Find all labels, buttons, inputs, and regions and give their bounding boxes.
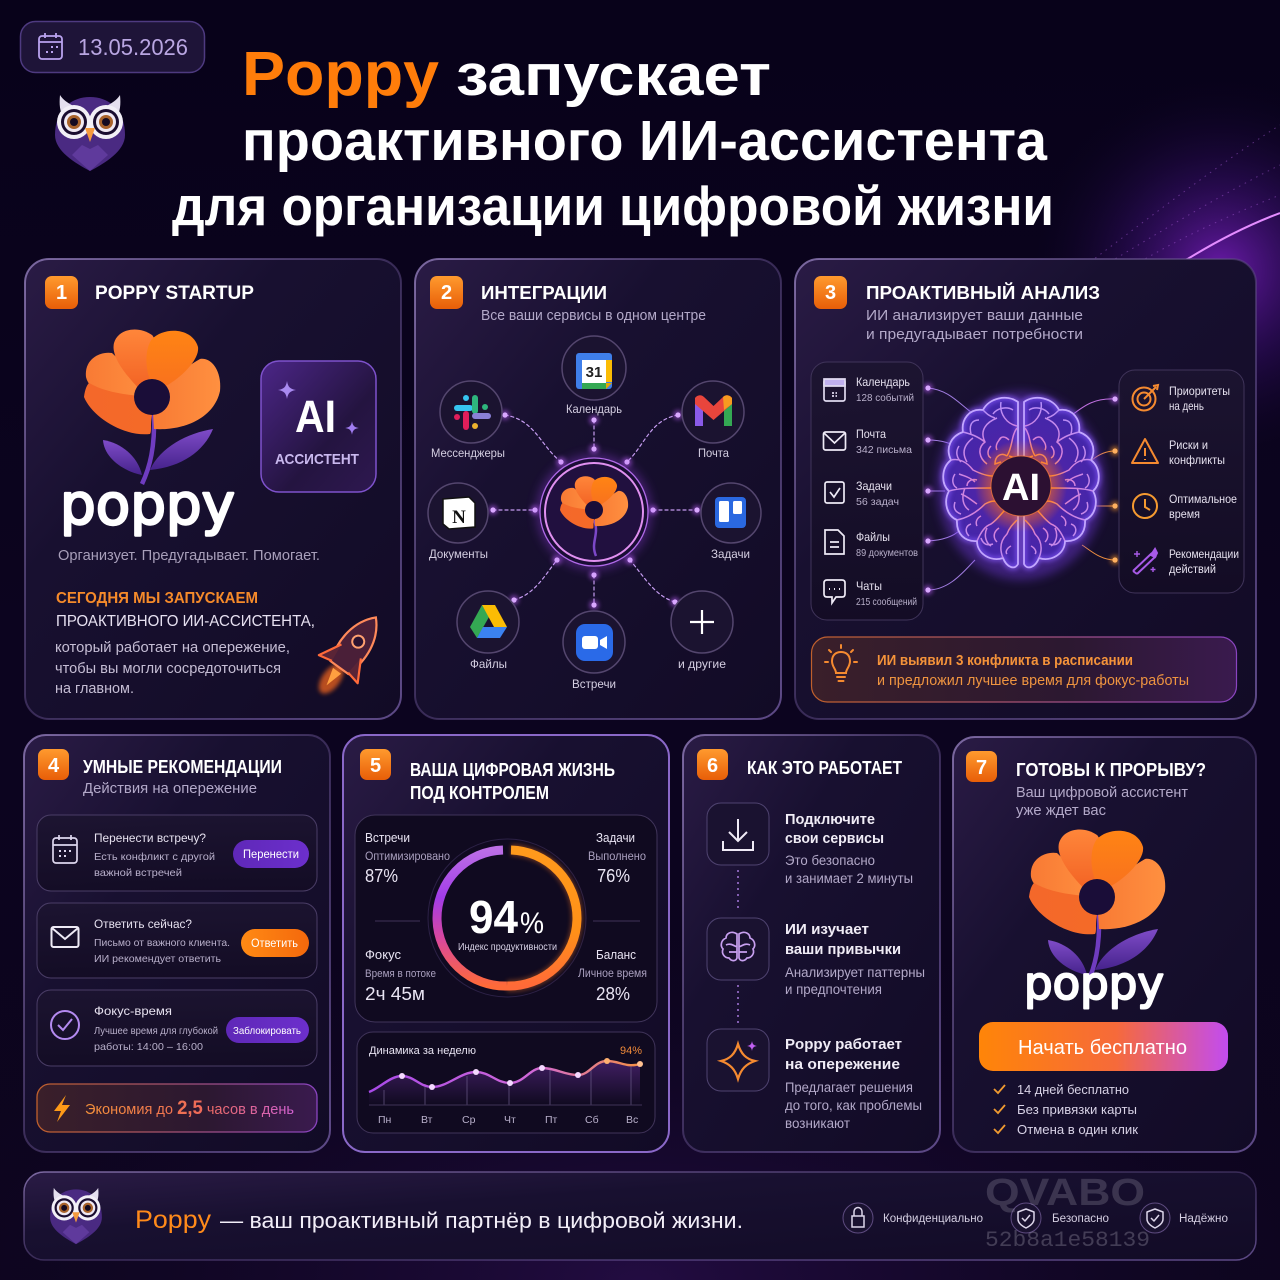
subheading: Все ваши сервисы в одном центре [481, 308, 706, 324]
date text: 13.05.2026 [78, 34, 188, 60]
weekly line chart: Ср [462, 1114, 476, 1126]
poppy wordmark: poppy [1024, 957, 1164, 1010]
icon: owl logo [50, 1188, 102, 1244]
stat: tasks: Выполнено [588, 851, 646, 863]
badge 2: 2 [441, 282, 452, 304]
service: documents: N [452, 507, 466, 528]
heading: ПРОАКТИВНЫЙ АНАЛИЗ [866, 282, 1100, 303]
panel 6: how it works [683, 735, 940, 1152]
output: risks: конфликты [1169, 453, 1225, 467]
panel 7: ready for a breakthrough [953, 737, 1256, 1152]
source: chats: 215 сообщений [856, 596, 917, 608]
source: chats [856, 579, 917, 608]
service: files: Файлы [470, 657, 507, 671]
badge 6 [697, 749, 728, 780]
service: others [671, 591, 733, 671]
badge 5 [360, 749, 391, 780]
stat: balance: Личное время [578, 968, 647, 980]
card: reschedule: Перенести встречу? [94, 831, 206, 845]
output: recommendations: Рекомендации [1169, 547, 1239, 561]
launch text: ПРОАКТИВНОГО ИИ-АССИСТЕНТА, [56, 613, 315, 630]
icon: AI brain [937, 392, 1105, 580]
icon: warning [1132, 439, 1158, 463]
stat: focus: Время в потоке [365, 968, 436, 980]
step 3 [707, 1029, 922, 1131]
stat: meetings: 87% [365, 866, 398, 886]
source: tasks: Задачи [856, 479, 892, 493]
card: focus time: Лучшее время для глубокой [94, 1025, 218, 1037]
heading: УМНЫЕ РЕКОМЕНДАЦИИ [83, 757, 282, 777]
feature checklist: Без привязки карты [1017, 1102, 1137, 1117]
heading: ПОД КОНТРОЛЕМ [410, 783, 549, 803]
icon: checkbox [825, 482, 844, 503]
badge: privacy [843, 1203, 983, 1233]
launch text: на главном. [55, 681, 134, 697]
badge: reliable [1140, 1203, 1228, 1233]
savings banner [37, 1084, 317, 1132]
connector dots [923, 383, 1120, 595]
icon: magic wand [1133, 549, 1157, 574]
title [172, 40, 1054, 237]
step 3: на опережение [785, 1056, 900, 1073]
source: tasks [856, 479, 899, 508]
panel 2: integrations [415, 259, 781, 719]
service: files [457, 591, 519, 671]
card: reschedule [37, 815, 317, 891]
stat: tasks: 76% [597, 866, 630, 886]
subheading: Ваш цифровой ассистент [1016, 785, 1188, 801]
subheading: Действия на опережение [83, 781, 257, 797]
card: reschedule: важной встречей [94, 867, 182, 879]
footer slogan: — ваш проактивный партнёр в цифровой жизни. [220, 1208, 743, 1233]
step 2: Анализирует паттерны [785, 965, 925, 980]
stat: balance [578, 947, 647, 1004]
ring chart [428, 839, 586, 997]
source: mail [856, 427, 912, 456]
card: focus time: Заблокировать [233, 1025, 301, 1037]
icon: chat [824, 580, 845, 603]
footer slogan: Poppy [135, 1206, 212, 1234]
stat: meetings: Встречи [365, 830, 410, 845]
badge 6: 6 [707, 755, 718, 777]
output: priorities [1169, 384, 1230, 413]
badge 3: 3 [825, 282, 836, 304]
service: tasks: Задачи [711, 547, 750, 561]
brain connectors [928, 388, 1115, 590]
panel 5: digital life under control [343, 735, 669, 1152]
stat: tasks: Задачи [596, 830, 635, 845]
central hub [536, 454, 652, 570]
stat: focus [365, 947, 436, 1004]
badge 2 [430, 276, 463, 309]
source: files: 89 документов [856, 547, 918, 559]
service: mail: Почта [698, 446, 729, 460]
step 1: Подключите [785, 811, 875, 828]
feature checklist: 14 дней бесплатно [1017, 1082, 1129, 1097]
output: recommendations: действий [1169, 562, 1216, 576]
card: reply: Ответить [251, 938, 298, 950]
ring chart: % [520, 907, 544, 940]
subheading: ИИ анализирует ваши данные [866, 308, 1083, 324]
service: calendar: 31 [586, 364, 602, 381]
source: chats: Чаты [856, 579, 882, 593]
title: Poppy [242, 40, 440, 109]
weekly line chart: 94% [620, 1045, 642, 1057]
icon: AI brain: AI [1002, 467, 1040, 509]
icon: calendar [39, 33, 62, 59]
stat: balance: 28% [596, 984, 630, 1004]
output: recommendations [1169, 547, 1239, 576]
card: reply: Ответить сейчас? [94, 917, 192, 931]
subheading [866, 308, 1083, 343]
service: calendar: Календарь [566, 402, 622, 416]
insight banner [812, 637, 1236, 702]
panel 1: Poppy startup [25, 259, 401, 719]
subheading: уже ждет вас [1016, 803, 1106, 819]
service: documents [428, 483, 488, 561]
source: files: Файлы [856, 530, 890, 544]
card: reply: Письмо от важного клиента. [94, 937, 230, 949]
step 3: Poppy работает [785, 1036, 902, 1053]
icon: file [825, 530, 844, 554]
card: focus time: Фокус-время [94, 1004, 172, 1018]
source: files [856, 530, 918, 559]
weekly line chart: Пт [545, 1114, 558, 1126]
AI assistant card: AI [295, 391, 336, 442]
step 2: ИИ изучает [785, 921, 869, 938]
step 2 [707, 918, 925, 997]
output: optimal time: время [1169, 507, 1200, 521]
step 3: возникают [785, 1116, 850, 1131]
badge 3 [814, 276, 847, 309]
heading: КАК ЭТО РАБОТАЕТ [747, 758, 902, 778]
service: mail [682, 381, 744, 460]
connector dots [488, 410, 702, 610]
heading: ИНТЕГРАЦИИ [481, 283, 607, 303]
output: optimal time: Оптимальное [1169, 492, 1237, 506]
subheading [1016, 785, 1188, 819]
service: meetings: Встречи [572, 677, 616, 691]
watermark: QVABO [985, 1172, 1145, 1214]
card: reply: ИИ рекомендует ответить [94, 953, 222, 965]
source: calendar: Календарь [856, 375, 910, 389]
weekly line chart: Динамика за неделю [369, 1045, 476, 1057]
AI assistant card: АССИСТЕНТ [275, 451, 359, 468]
icon: rocket [302, 603, 395, 707]
output: priorities: на день [1169, 399, 1204, 413]
savings banner: Экономия до 2,5 часов в день [85, 1098, 294, 1119]
footer bar [24, 1172, 1256, 1260]
badge: secure [1011, 1203, 1109, 1233]
source: mail: Почта [856, 427, 886, 441]
step 3: до того, как проблемы [785, 1098, 922, 1113]
stat: focus: Фокус [365, 947, 401, 962]
badge 5: 5 [370, 755, 381, 777]
service: messengers: Мессенджеры [431, 446, 505, 460]
poppy wordmark: poppy [60, 473, 235, 538]
service: calendar [562, 336, 626, 416]
CTA button: Начать бесплатно [1018, 1037, 1187, 1059]
subheading: и предугадывает потребности [866, 327, 1083, 343]
icon: clock [1133, 494, 1157, 518]
weekly line chart [357, 1032, 655, 1133]
weekly line chart: Вт [421, 1114, 433, 1126]
step 3: Предлагает решения [785, 1080, 913, 1095]
step 1: свои сервисы [785, 830, 884, 847]
weekly line chart: Вс [626, 1114, 638, 1126]
icon: mail [824, 432, 846, 450]
title: проактивного ИИ-ассистента [242, 109, 1048, 173]
ring chart: 94 [469, 891, 518, 943]
step connectors [737, 870, 739, 1024]
output: priorities: Приоритеты [1169, 384, 1230, 398]
step 1: и занимает 2 минуты [785, 871, 913, 886]
launch text: который работает на опережение, [55, 640, 290, 656]
badge 7 [966, 751, 997, 782]
weekly line chart: Чт [504, 1114, 516, 1126]
watermark: 52b8a1e58139 [985, 1228, 1150, 1253]
title: запускает [456, 43, 771, 108]
service: others: и другие [678, 657, 726, 671]
icon: poppy flower [84, 329, 220, 484]
card: reschedule: Есть конфликт с другой [94, 851, 215, 863]
stat: meetings [365, 830, 450, 886]
insight text: ИИ выявил 3 конфликта в расписании [877, 652, 1133, 669]
title: для организации цифровой жизни [172, 175, 1054, 237]
outputs list [1119, 370, 1244, 593]
heading [410, 760, 615, 803]
AI assistant card [261, 361, 376, 492]
feature checklist [994, 1082, 1138, 1137]
watermark [985, 1172, 1150, 1253]
productivity card [355, 815, 657, 1022]
tagline: Организует. Предугадывает. Помогает. [58, 548, 320, 564]
panel 4: smart recommendations [24, 735, 330, 1152]
icon: owl logo [55, 95, 125, 171]
weekly line chart: Сб [585, 1114, 599, 1126]
source: tasks: 56 задач [856, 496, 899, 508]
heading: POPPY STARTUP [95, 283, 254, 304]
badge 4 [38, 749, 69, 780]
service: messengers [431, 381, 505, 460]
source: calendar [856, 375, 914, 404]
step 2: ваши привычки [785, 941, 901, 958]
output: risks [1169, 438, 1225, 467]
source: calendar: 128 событий [856, 392, 914, 404]
card: focus time: работы: 14:00 – 16:00 [94, 1041, 203, 1053]
insight text: и предложил лучшее время для фокус-работы [877, 672, 1189, 689]
step 2: и предпочтения [785, 982, 882, 997]
card: reply [37, 903, 317, 978]
icon: poppy flower [1029, 829, 1165, 984]
badge: privacy: Конфиденциально [883, 1213, 983, 1225]
launch text: СЕГОДНЯ МЫ ЗАПУСКАЕМ [56, 590, 258, 607]
ring chart: Индекс продуктивности [458, 942, 557, 953]
CTA button [979, 1022, 1228, 1071]
badge 7: 7 [976, 757, 987, 779]
launch text: чтобы вы могли сосредоточиться [55, 661, 281, 677]
heading: ВАША ЦИФРОВАЯ ЖИЗНЬ [410, 760, 615, 780]
heading: ГОТОВЫ К ПРОРЫВУ? [1016, 760, 1206, 780]
icon: target [1132, 385, 1158, 410]
feature checklist: Отмена в один клик [1017, 1122, 1138, 1137]
service: tasks [701, 483, 761, 561]
icon: light bulb [825, 645, 857, 681]
card: reschedule: Перенести [243, 849, 299, 861]
service: documents: Документы [429, 547, 488, 561]
stat: balance: Баланс [596, 947, 636, 962]
icon: calendar [824, 379, 845, 401]
badge: secure: Безопасно [1052, 1213, 1109, 1225]
insight text [877, 652, 1189, 689]
stat: focus: 2ч 45м [365, 984, 425, 1004]
panel 3: proactive analysis [795, 259, 1256, 719]
service: meetings [563, 611, 625, 691]
badge 1 [45, 276, 78, 309]
stat: meetings: Оптимизировано [365, 851, 450, 863]
weekly line chart: Пн [378, 1114, 392, 1126]
step 1: Это безопасно [785, 853, 875, 868]
step 1 [707, 803, 913, 886]
output: optimal time [1169, 492, 1237, 521]
data sources list [811, 362, 923, 620]
badge 1: 1 [56, 282, 67, 304]
badge 4: 4 [48, 755, 60, 777]
source: mail: 342 письма [856, 444, 912, 456]
date chip [20, 22, 204, 72]
stat: tasks [588, 830, 646, 886]
card: focus time [37, 990, 317, 1066]
launch text [55, 590, 315, 697]
output: risks: Риски и [1169, 438, 1208, 452]
badge: reliable: Надёжно [1179, 1213, 1228, 1225]
dashed connectors [493, 415, 697, 605]
